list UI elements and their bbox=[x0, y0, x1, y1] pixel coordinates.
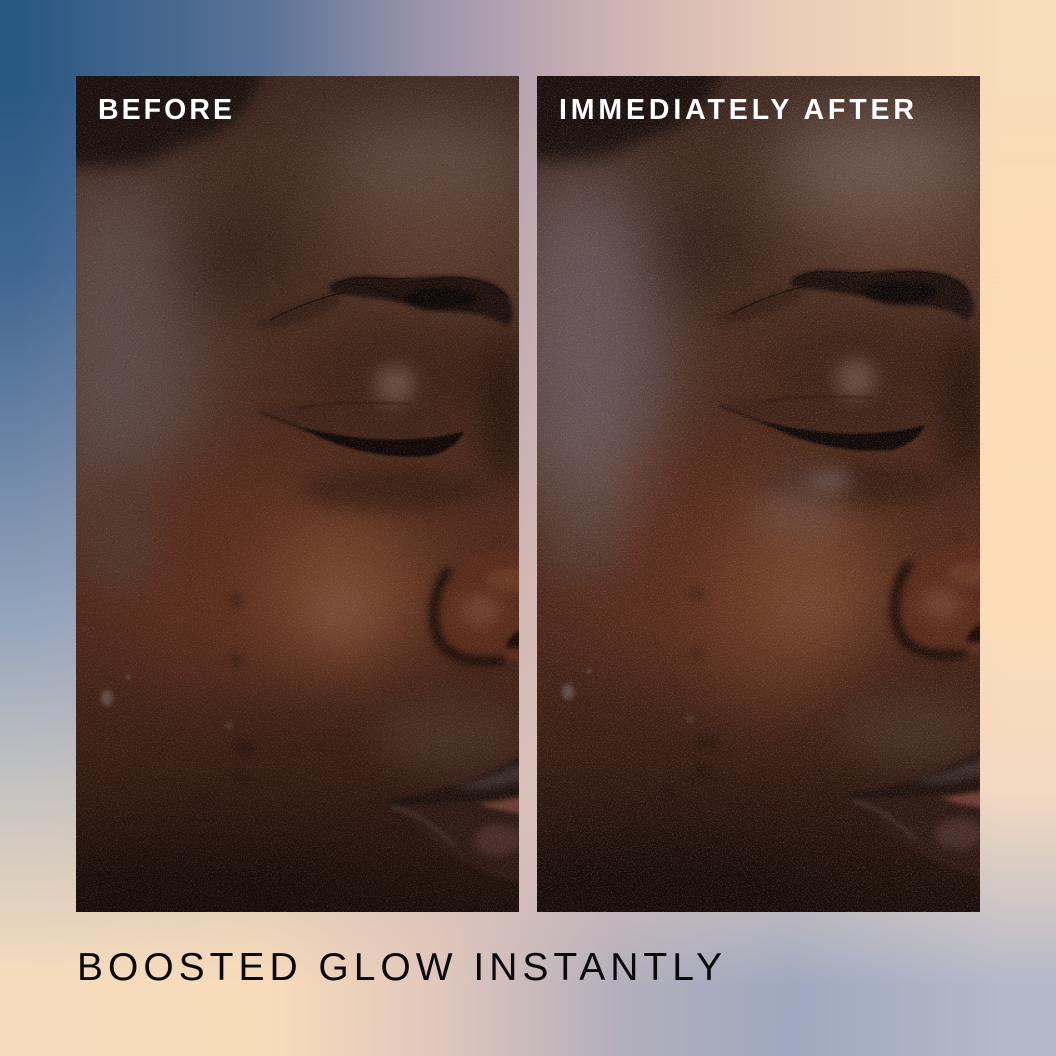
glow highlights bbox=[528, 125, 970, 730]
label: immediately after: IMMEDIATELY AFTER bbox=[559, 94, 914, 126]
label: before: BEFORE bbox=[98, 94, 232, 126]
panel: immediately after photo bbox=[537, 76, 980, 912]
caption: BOOSTED GLOW INSTANTLY bbox=[77, 946, 722, 989]
